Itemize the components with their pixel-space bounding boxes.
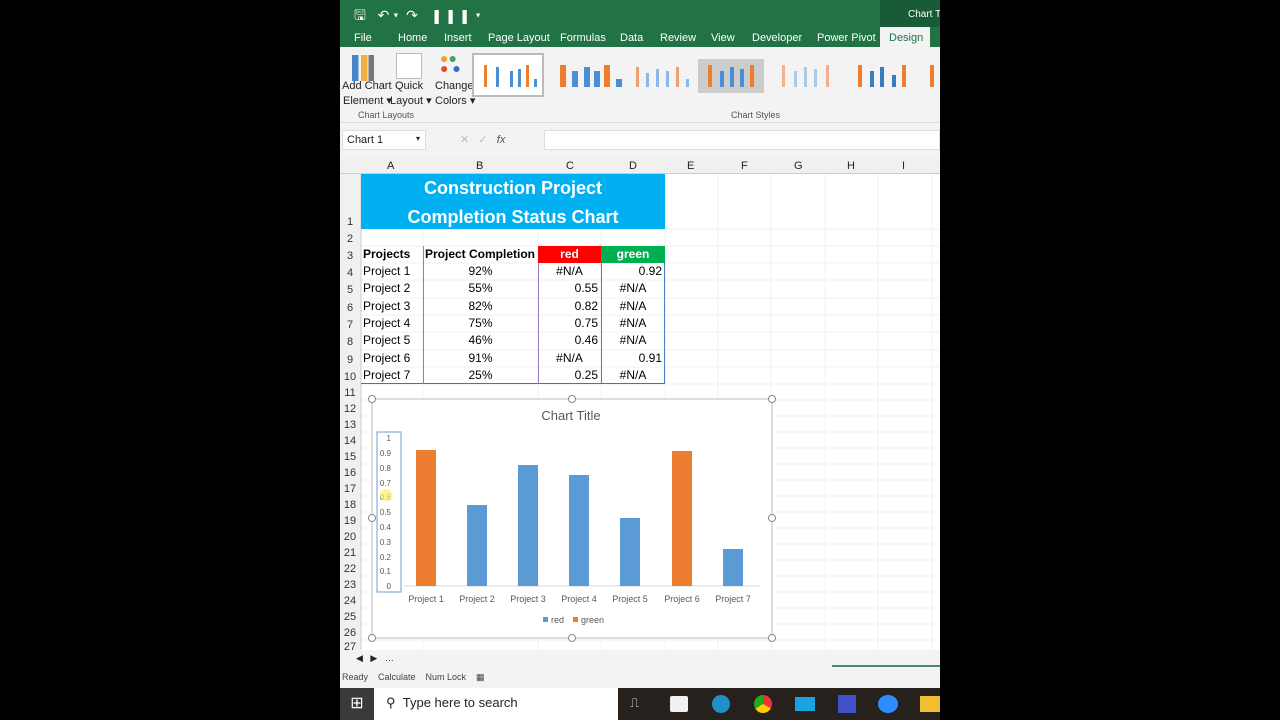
grid: 9 — [347, 354, 353, 366]
column headers: B — [476, 160, 483, 172]
data table: 82% — [468, 299, 493, 313]
formula bar — [340, 123, 940, 158]
data table: 0.92 — [639, 264, 662, 278]
grid: 13 — [344, 419, 356, 431]
data table: #N/A — [620, 333, 646, 347]
ribbon body: Colors ▾ — [435, 95, 475, 107]
data table: 25% — [468, 368, 493, 382]
chart: 0.3 — [380, 538, 392, 547]
sheet tabs: ◀ ▶ … — [356, 653, 394, 663]
chart: 0 — [387, 582, 392, 591]
column headers: F — [741, 160, 748, 172]
formula bar: ✕ ✓ fx — [460, 134, 505, 146]
data table: #N/A — [620, 316, 646, 330]
data table: 46% — [468, 333, 493, 347]
chart: 1 — [387, 434, 392, 443]
ribbon body: Chart Layouts — [358, 110, 414, 120]
grid: 19 — [344, 515, 356, 527]
data table: 75% — [468, 316, 493, 330]
grid: 18 — [344, 499, 356, 511]
ribbon tabs: Page Layout — [488, 32, 550, 44]
sheet tabs — [340, 650, 940, 668]
icon: add chart element — [352, 55, 374, 81]
grid: 15 — [344, 451, 356, 463]
chart: Project 7 — [715, 594, 751, 604]
chart: 0.1 — [380, 567, 392, 576]
column headers: I — [902, 160, 905, 172]
grid: 6 — [347, 302, 353, 314]
column headers: H — [847, 160, 855, 172]
grid: 20 — [344, 531, 356, 543]
chart: 0.8 — [380, 464, 392, 473]
data table: 92% — [468, 264, 493, 278]
ribbon body: Change — [435, 80, 474, 92]
ribbon tabs: Developer — [752, 32, 802, 44]
data table: #N/A — [620, 299, 646, 313]
data table: 0.91 — [639, 351, 662, 365]
taskbar — [340, 688, 940, 720]
ribbon body: Add Chart — [342, 80, 392, 92]
ribbon body: Quick — [395, 80, 423, 92]
grid: 7 — [347, 319, 353, 331]
grid: 22 — [344, 563, 356, 575]
column headers: E — [687, 160, 694, 172]
data table: #N/A — [556, 264, 583, 278]
chart: Project 5 — [612, 594, 648, 604]
chart: 0.4 — [380, 523, 392, 532]
chart: green — [581, 615, 604, 625]
title cell — [361, 174, 665, 229]
taskbar: ⊞ — [350, 695, 364, 712]
data table: Project 7 — [363, 368, 410, 382]
data table: Projects — [363, 247, 410, 261]
data table: 0.82 — [575, 299, 598, 313]
ribbon body: Chart Styles — [731, 110, 780, 120]
formula bar: ▾ — [416, 134, 420, 143]
excel window — [340, 0, 940, 720]
chart: 0.6 — [380, 493, 392, 502]
grid — [340, 174, 940, 650]
grid: 10 — [344, 371, 356, 383]
ribbon tabs: Data — [620, 32, 643, 44]
data table: 0.55 — [575, 281, 598, 295]
data table: Project 5 — [363, 333, 410, 347]
chart: Project 4 — [561, 594, 597, 604]
data table: Project 1 — [363, 264, 410, 278]
icon: change colors: ●● — [440, 50, 457, 66]
ribbon body — [340, 47, 940, 123]
grid: 3 — [347, 250, 353, 262]
icon: change colors — [440, 50, 461, 76]
chart — [368, 395, 776, 642]
chart: Project 2 — [459, 594, 495, 604]
taskbar: ⎍ — [630, 695, 639, 710]
column headers: G — [794, 160, 803, 172]
data table: 55% — [468, 281, 493, 295]
grid: 17 — [344, 483, 356, 495]
data table: Project 3 — [363, 299, 410, 313]
ribbon tabs: File — [354, 32, 372, 44]
ribbon tabs: Review — [660, 32, 696, 44]
title bar: 🖫 ↶ ▾ ↷ ▮▮▮ ▾ — [354, 7, 481, 23]
chart: Project 6 — [664, 594, 700, 604]
grid: 11 — [344, 387, 356, 399]
title bar — [340, 0, 940, 27]
grid: 21 — [344, 547, 356, 559]
column headers: C — [566, 160, 574, 172]
taskbar: ⚲ Type here to search — [386, 695, 518, 710]
status bar — [340, 668, 940, 688]
chart: 0.9 — [380, 449, 392, 458]
grid: 2 — [347, 233, 353, 245]
ribbon tabs — [340, 27, 940, 47]
data table: 0.25 — [575, 368, 598, 382]
grid: 16 — [344, 467, 356, 479]
grid: 26 — [344, 627, 356, 639]
ribbon body: Element ▾ — [343, 95, 392, 107]
column headers — [340, 158, 940, 174]
title cell: Completion Status Chart — [407, 207, 618, 227]
grid: 23 — [344, 579, 356, 591]
data table: 0.46 — [575, 333, 598, 347]
data table: #N/A — [620, 281, 646, 295]
chart: Project 1 — [408, 594, 444, 604]
formula bar: Chart 1 — [347, 134, 383, 146]
data table: 0.75 — [575, 316, 598, 330]
chart: Chart Title — [541, 408, 601, 423]
chart: 0.2 — [380, 553, 392, 562]
grid: 14 — [344, 435, 356, 447]
title cell: Construction Project — [424, 178, 602, 198]
data table — [361, 246, 665, 384]
ribbon tabs: Power Pivot — [817, 32, 876, 44]
chart: 0.7 — [380, 479, 392, 488]
data table: #N/A — [620, 368, 646, 382]
data table: green — [617, 247, 649, 261]
grid: 4 — [347, 267, 353, 279]
data table: Project 4 — [363, 316, 410, 330]
grid: 24 — [344, 595, 356, 607]
data table: Project Completion — [425, 247, 535, 261]
ribbon tabs: Home — [398, 32, 427, 44]
data table: #N/A — [556, 351, 583, 365]
grid: 1 — [347, 216, 353, 228]
grid: 12 — [344, 403, 356, 415]
grid: 25 — [344, 611, 356, 623]
data table: Project 2 — [363, 281, 410, 295]
chart: red — [551, 615, 564, 625]
ribbon body: Layout ▾ — [390, 95, 432, 107]
icon: change colors: ● ● — [440, 60, 461, 76]
column headers: D — [629, 160, 637, 172]
ribbon tabs: Formulas — [560, 32, 606, 44]
chart: 0.5 — [380, 508, 392, 517]
ribbon tabs: Insert — [444, 32, 472, 44]
data table: 91% — [468, 351, 493, 365]
grid: 8 — [347, 336, 353, 348]
chart styles gallery — [472, 53, 544, 97]
data table: Project 6 — [363, 351, 410, 365]
grid: 5 — [347, 284, 353, 296]
column headers: A — [387, 160, 394, 172]
data table: red — [560, 247, 579, 261]
status bar: Ready Calculate Num Lock ▦ — [342, 672, 485, 682]
chart: Project 3 — [510, 594, 546, 604]
ribbon tabs: Design — [889, 32, 923, 44]
ribbon tabs: View — [711, 32, 735, 44]
